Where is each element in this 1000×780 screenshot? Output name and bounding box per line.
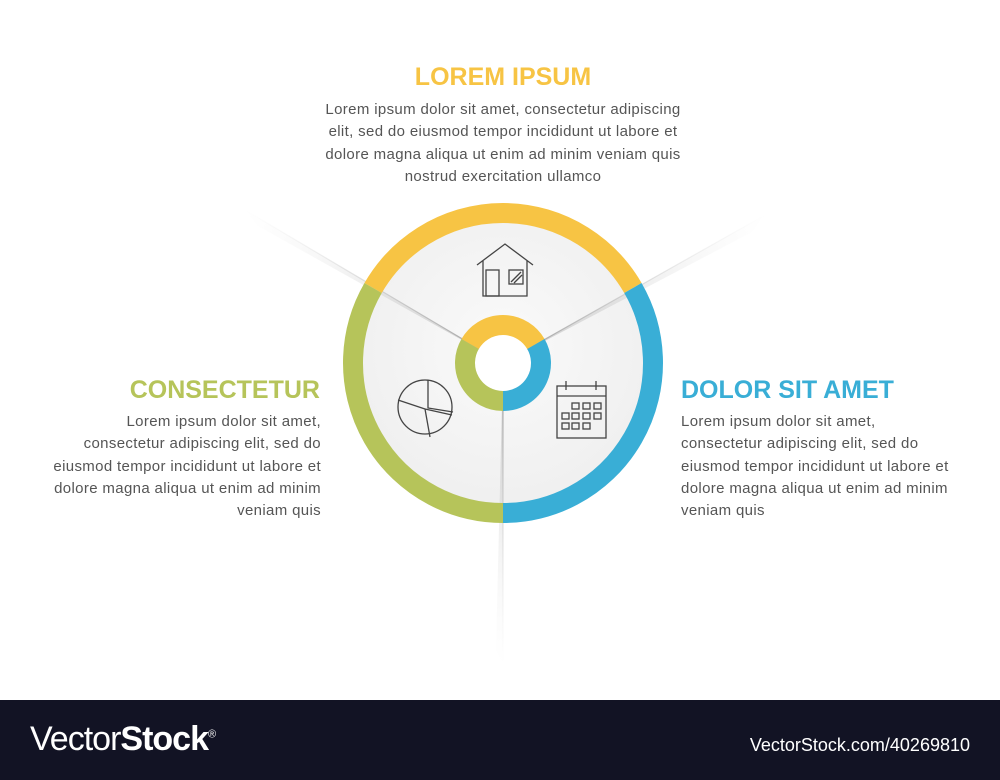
text: left	[53, 413, 321, 519]
text: right: Lorem ipsum dolor sit amet,	[681, 413, 876, 430]
footer bar	[0, 700, 1000, 780]
divider shadows	[245, 210, 765, 665]
icon: pie chart	[398, 380, 453, 437]
text: right	[681, 413, 949, 519]
text: top	[325, 101, 681, 185]
text: left: consectetur adipiscing elit, sed do	[84, 435, 321, 452]
text: right: dolore magna aliqua ut enim ad minim	[681, 480, 948, 497]
text: top: nostrud exercitation ullamco	[405, 168, 601, 185]
text: top: elit, sed do eiusmod tempor incididunt ut labore et	[329, 123, 677, 140]
text: left: Lorem ipsum dolor sit amet,	[126, 413, 321, 430]
text: top: Lorem ipsum dolor sit amet, consectetur adipiscing	[325, 101, 681, 118]
heading: consectetur: CONSECTETUR	[130, 376, 320, 404]
text: left: veniam quis	[237, 502, 321, 519]
inner ring	[465, 325, 541, 401]
outer ring	[353, 213, 653, 513]
heading: dolor sit amet: DOLOR SIT AMET	[681, 376, 894, 404]
heading: lorem ipsum: LOREM IPSUM	[415, 63, 591, 91]
icon: house	[477, 244, 533, 296]
text: left: dolore magna aliqua ut enim ad minim	[54, 480, 321, 497]
text: right: eiusmod tempor incididunt ut labore et	[681, 458, 949, 475]
text: top: dolore magna aliqua ut enim ad minim veniam quis	[325, 146, 681, 163]
text: left: eiusmod tempor incididunt ut labore et	[53, 458, 321, 475]
icon: calendar	[557, 381, 606, 438]
text: right: consectetur adipiscing elit, sed do	[681, 435, 918, 452]
footer url: VectorStock.com/40269810	[750, 735, 970, 755]
footer logo: VectorStock®	[30, 720, 215, 758]
text: right: veniam quis	[681, 502, 765, 519]
